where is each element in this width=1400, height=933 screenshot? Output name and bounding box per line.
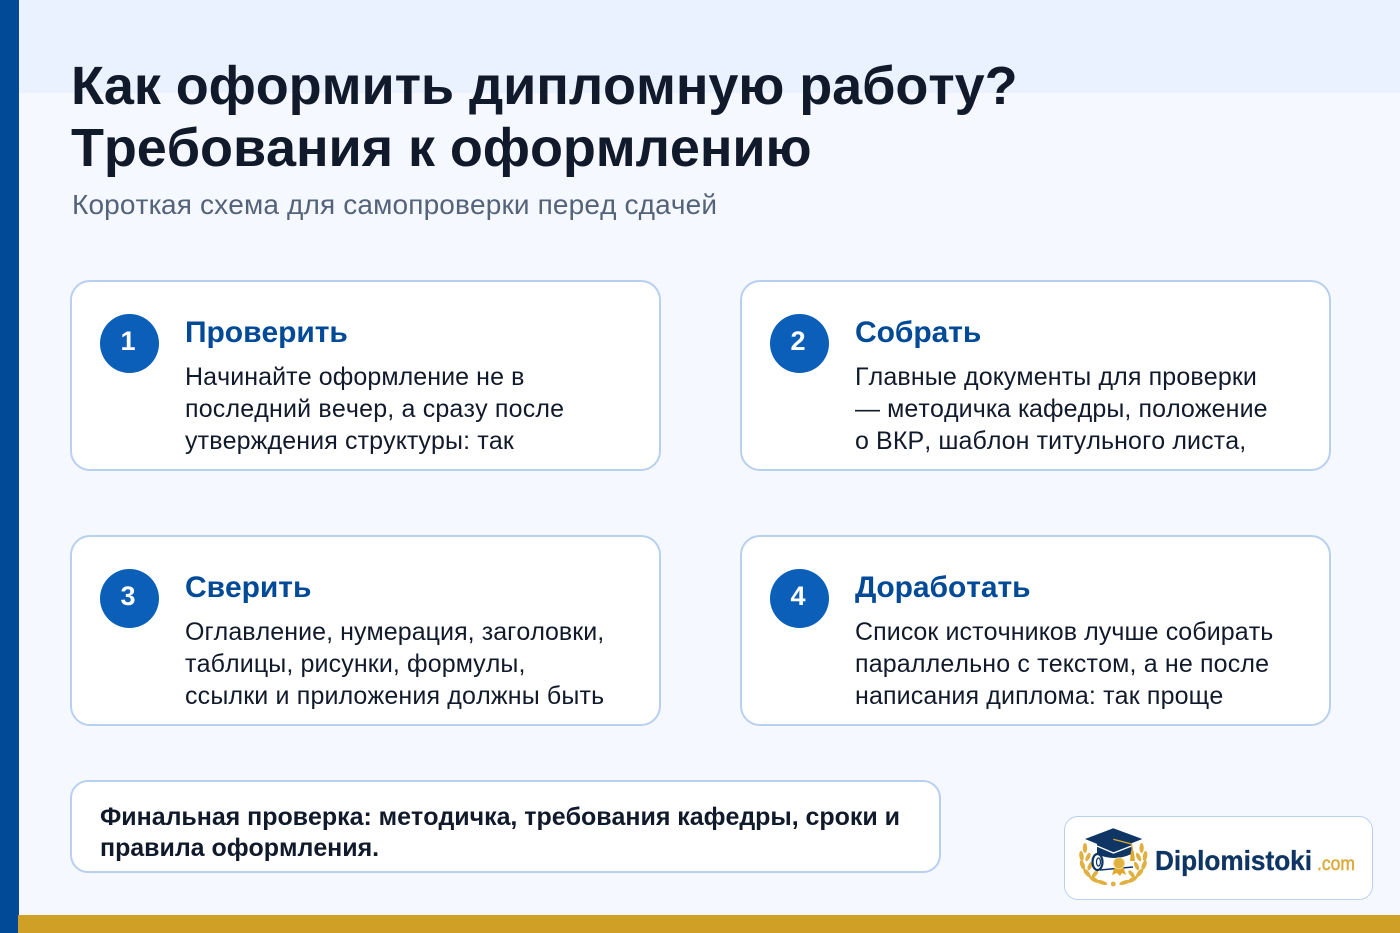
panel: step 2 bbox=[740, 280, 1331, 471]
text: step 1: Начинайте оформление не в bbox=[185, 363, 524, 391]
text: step 1: утверждения структуры: так bbox=[185, 427, 514, 455]
number badge 2: 2 bbox=[790, 326, 806, 356]
panel: step 1 bbox=[70, 280, 661, 471]
subtitle: Короткая схема для самопроверки перед сдачей bbox=[72, 189, 717, 220]
bottom gold bar bbox=[18, 915, 1400, 933]
text: step 4 bbox=[855, 618, 1273, 710]
logo card bbox=[1064, 816, 1373, 900]
text: step 3 bbox=[185, 618, 604, 710]
number badge 4: 4 bbox=[790, 581, 806, 611]
number badge 3: 3 bbox=[120, 581, 136, 611]
title: Требования к оформлению bbox=[71, 118, 812, 178]
text: step 2: о ВКР, шаблон титульного листа, bbox=[855, 427, 1246, 455]
number badge 1 bbox=[100, 314, 159, 373]
text: step 3: Оглавление, нумерация, заголовки, bbox=[185, 618, 604, 646]
number badge 2 bbox=[770, 314, 829, 373]
icon: laurel wreath bbox=[1079, 843, 1148, 886]
logo wordmark: Diplomistoki bbox=[1155, 845, 1312, 876]
text: step 4: параллельно с текстом, а не после bbox=[855, 650, 1269, 678]
callout text: правила оформления. bbox=[100, 834, 379, 862]
heading: step 3: Сверить bbox=[185, 571, 311, 604]
text: step 1 bbox=[185, 363, 564, 455]
logo domain: .com bbox=[1317, 854, 1355, 875]
text: step 1: последний вечер, а сразу после bbox=[185, 395, 564, 423]
text: step 4: написания диплома: так проще bbox=[855, 682, 1223, 710]
text: step 2: — методичка кафедры, положение bbox=[855, 395, 1268, 423]
text: step 4: Список источников лучше собирать bbox=[855, 618, 1273, 646]
number badge 3 bbox=[100, 569, 159, 628]
heading: step 2: Собрать bbox=[855, 316, 981, 349]
header band bbox=[18, 0, 1400, 93]
title: Как оформить дипломную работу? bbox=[71, 56, 1018, 116]
callout text bbox=[100, 803, 900, 862]
heading: step 4: Доработать bbox=[855, 571, 1031, 604]
text: step 3: ссылки и приложения должны быть bbox=[185, 682, 604, 710]
text: step 2: Главные документы для проверки bbox=[855, 363, 1257, 391]
callout text: Финальная проверка: методичка, требования кафедры, сроки и bbox=[100, 803, 900, 831]
number badge 1: 1 bbox=[120, 326, 136, 356]
icon: diploma scroll and seal bbox=[1092, 854, 1133, 876]
icon: graduation cap bbox=[1085, 828, 1142, 861]
left accent bar bbox=[0, 0, 19, 933]
text: step 3: таблицы, рисунки, формулы, bbox=[185, 650, 526, 678]
panel: step 3 bbox=[70, 535, 661, 726]
callout: final check bbox=[70, 780, 941, 873]
text: step 2 bbox=[855, 363, 1268, 455]
title bbox=[71, 56, 1018, 178]
heading: step 1: Проверить bbox=[185, 316, 348, 349]
logo bbox=[1079, 828, 1355, 886]
number badge 4 bbox=[770, 569, 829, 628]
panel: step 4 bbox=[740, 535, 1331, 726]
